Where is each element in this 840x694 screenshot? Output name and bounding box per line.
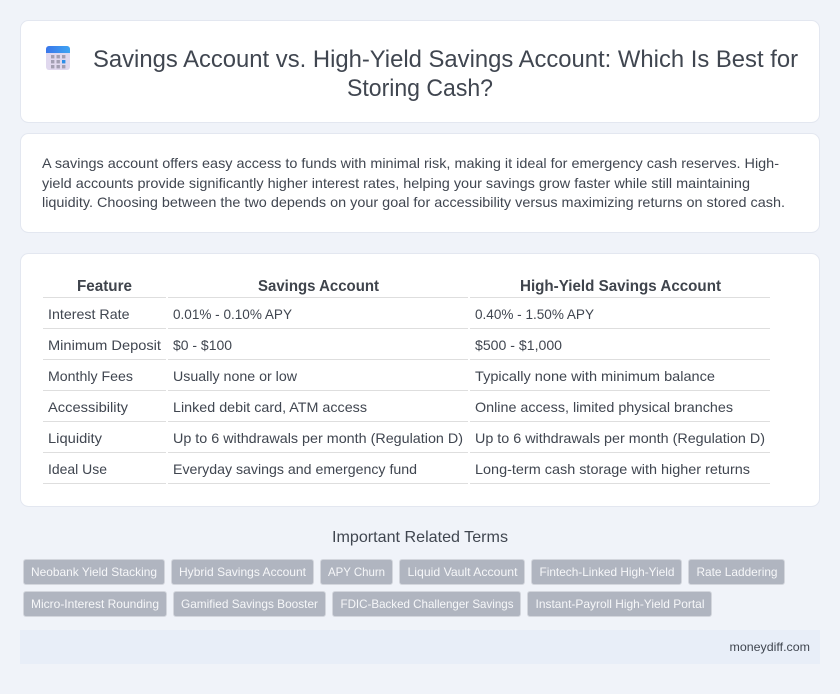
title panel: [20, 20, 820, 122]
row: minimum deposit: $500 - $1,000: [475, 337, 562, 353]
footer: [20, 630, 820, 664]
icon: calendar: [46, 46, 70, 70]
row: interest rate: 0.40% - 1.50% APY: [475, 306, 595, 322]
row: ideal use: Ideal Use: [48, 461, 107, 477]
title text: Storing Cash?: [347, 75, 493, 102]
row: accessibility: Online access, limited physical branches: [475, 399, 733, 415]
related term tags: [24, 560, 784, 616]
row: interest rate: 0.01% - 0.10% APY: [173, 306, 293, 322]
related term tags: Instant-Payroll High-Yield Portal: [536, 597, 704, 611]
row: ideal use: Long-term cash storage with higher returns: [475, 461, 750, 477]
title text: Savings Account vs. High-Yield Savings Account: Which Is Best for: [93, 46, 798, 73]
description panel: [20, 134, 820, 232]
heading: important related terms: Important Related Terms: [332, 529, 508, 546]
comparison table panel: [20, 254, 820, 506]
description text: A savings account offers easy access to funds with minimal risk, making it ideal for emergency cash reserves. High-: [42, 155, 779, 171]
row: liquidity: Up to 6 withdrawals per month (Regulation D): [475, 430, 765, 446]
row: minimum deposit: $0 - $100: [173, 337, 232, 353]
row: monthly fees: Typically none with minimum balance: [475, 368, 715, 384]
table header: High-Yield Savings Account: [520, 278, 722, 295]
related term tags: Hybrid Savings Account: [179, 565, 307, 579]
row: accessibility: [48, 399, 733, 415]
row: ideal use: [48, 461, 750, 477]
related term tags: Neobank Yield Stacking: [31, 565, 157, 579]
row: liquidity: [48, 430, 765, 446]
row: liquidity: Up to 6 withdrawals per month (Regulation D): [173, 430, 463, 446]
row: interest rate: Interest Rate: [48, 306, 130, 322]
related term tags: APY Churn: [328, 565, 385, 579]
related term tags: Fintech-Linked High-Yield: [540, 565, 674, 579]
related term tags: Rate Laddering: [696, 565, 778, 579]
related term tags: FDIC-Backed Challenger Savings: [340, 597, 514, 611]
related term tags: Liquid Vault Account: [408, 565, 518, 579]
row: accessibility: Accessibility: [48, 399, 128, 415]
footer: moneydiff.com: [730, 640, 810, 654]
row: liquidity: Liquidity: [48, 430, 102, 446]
description text: [42, 155, 785, 210]
row: monthly fees: Monthly Fees: [48, 368, 133, 384]
row: monthly fees: [48, 368, 715, 384]
row: ideal use: Everyday savings and emergency fund: [173, 461, 417, 477]
table header: [77, 278, 722, 295]
row: monthly fees: Usually none or low: [173, 368, 298, 384]
row: minimum deposit: Minimum Deposit: [48, 337, 161, 353]
related term tags: Micro-Interest Rounding: [31, 597, 159, 611]
row: accessibility: Linked debit card, ATM access: [173, 399, 367, 415]
related term tags: Gamified Savings Booster: [181, 597, 318, 611]
table header: Savings Account: [258, 278, 380, 295]
description text: yield accounts provide significantly higher interest rates, helping your savings grow faster while still maintaining: [42, 175, 750, 191]
row: minimum deposit: [48, 337, 562, 353]
title text: [93, 46, 798, 102]
description text: liquidity. Choosing between the two depends on your goal for accessibility versus maximizing returns on stored cash.: [42, 194, 785, 210]
table header: Feature: [77, 278, 132, 295]
row: interest rate: [48, 306, 595, 322]
